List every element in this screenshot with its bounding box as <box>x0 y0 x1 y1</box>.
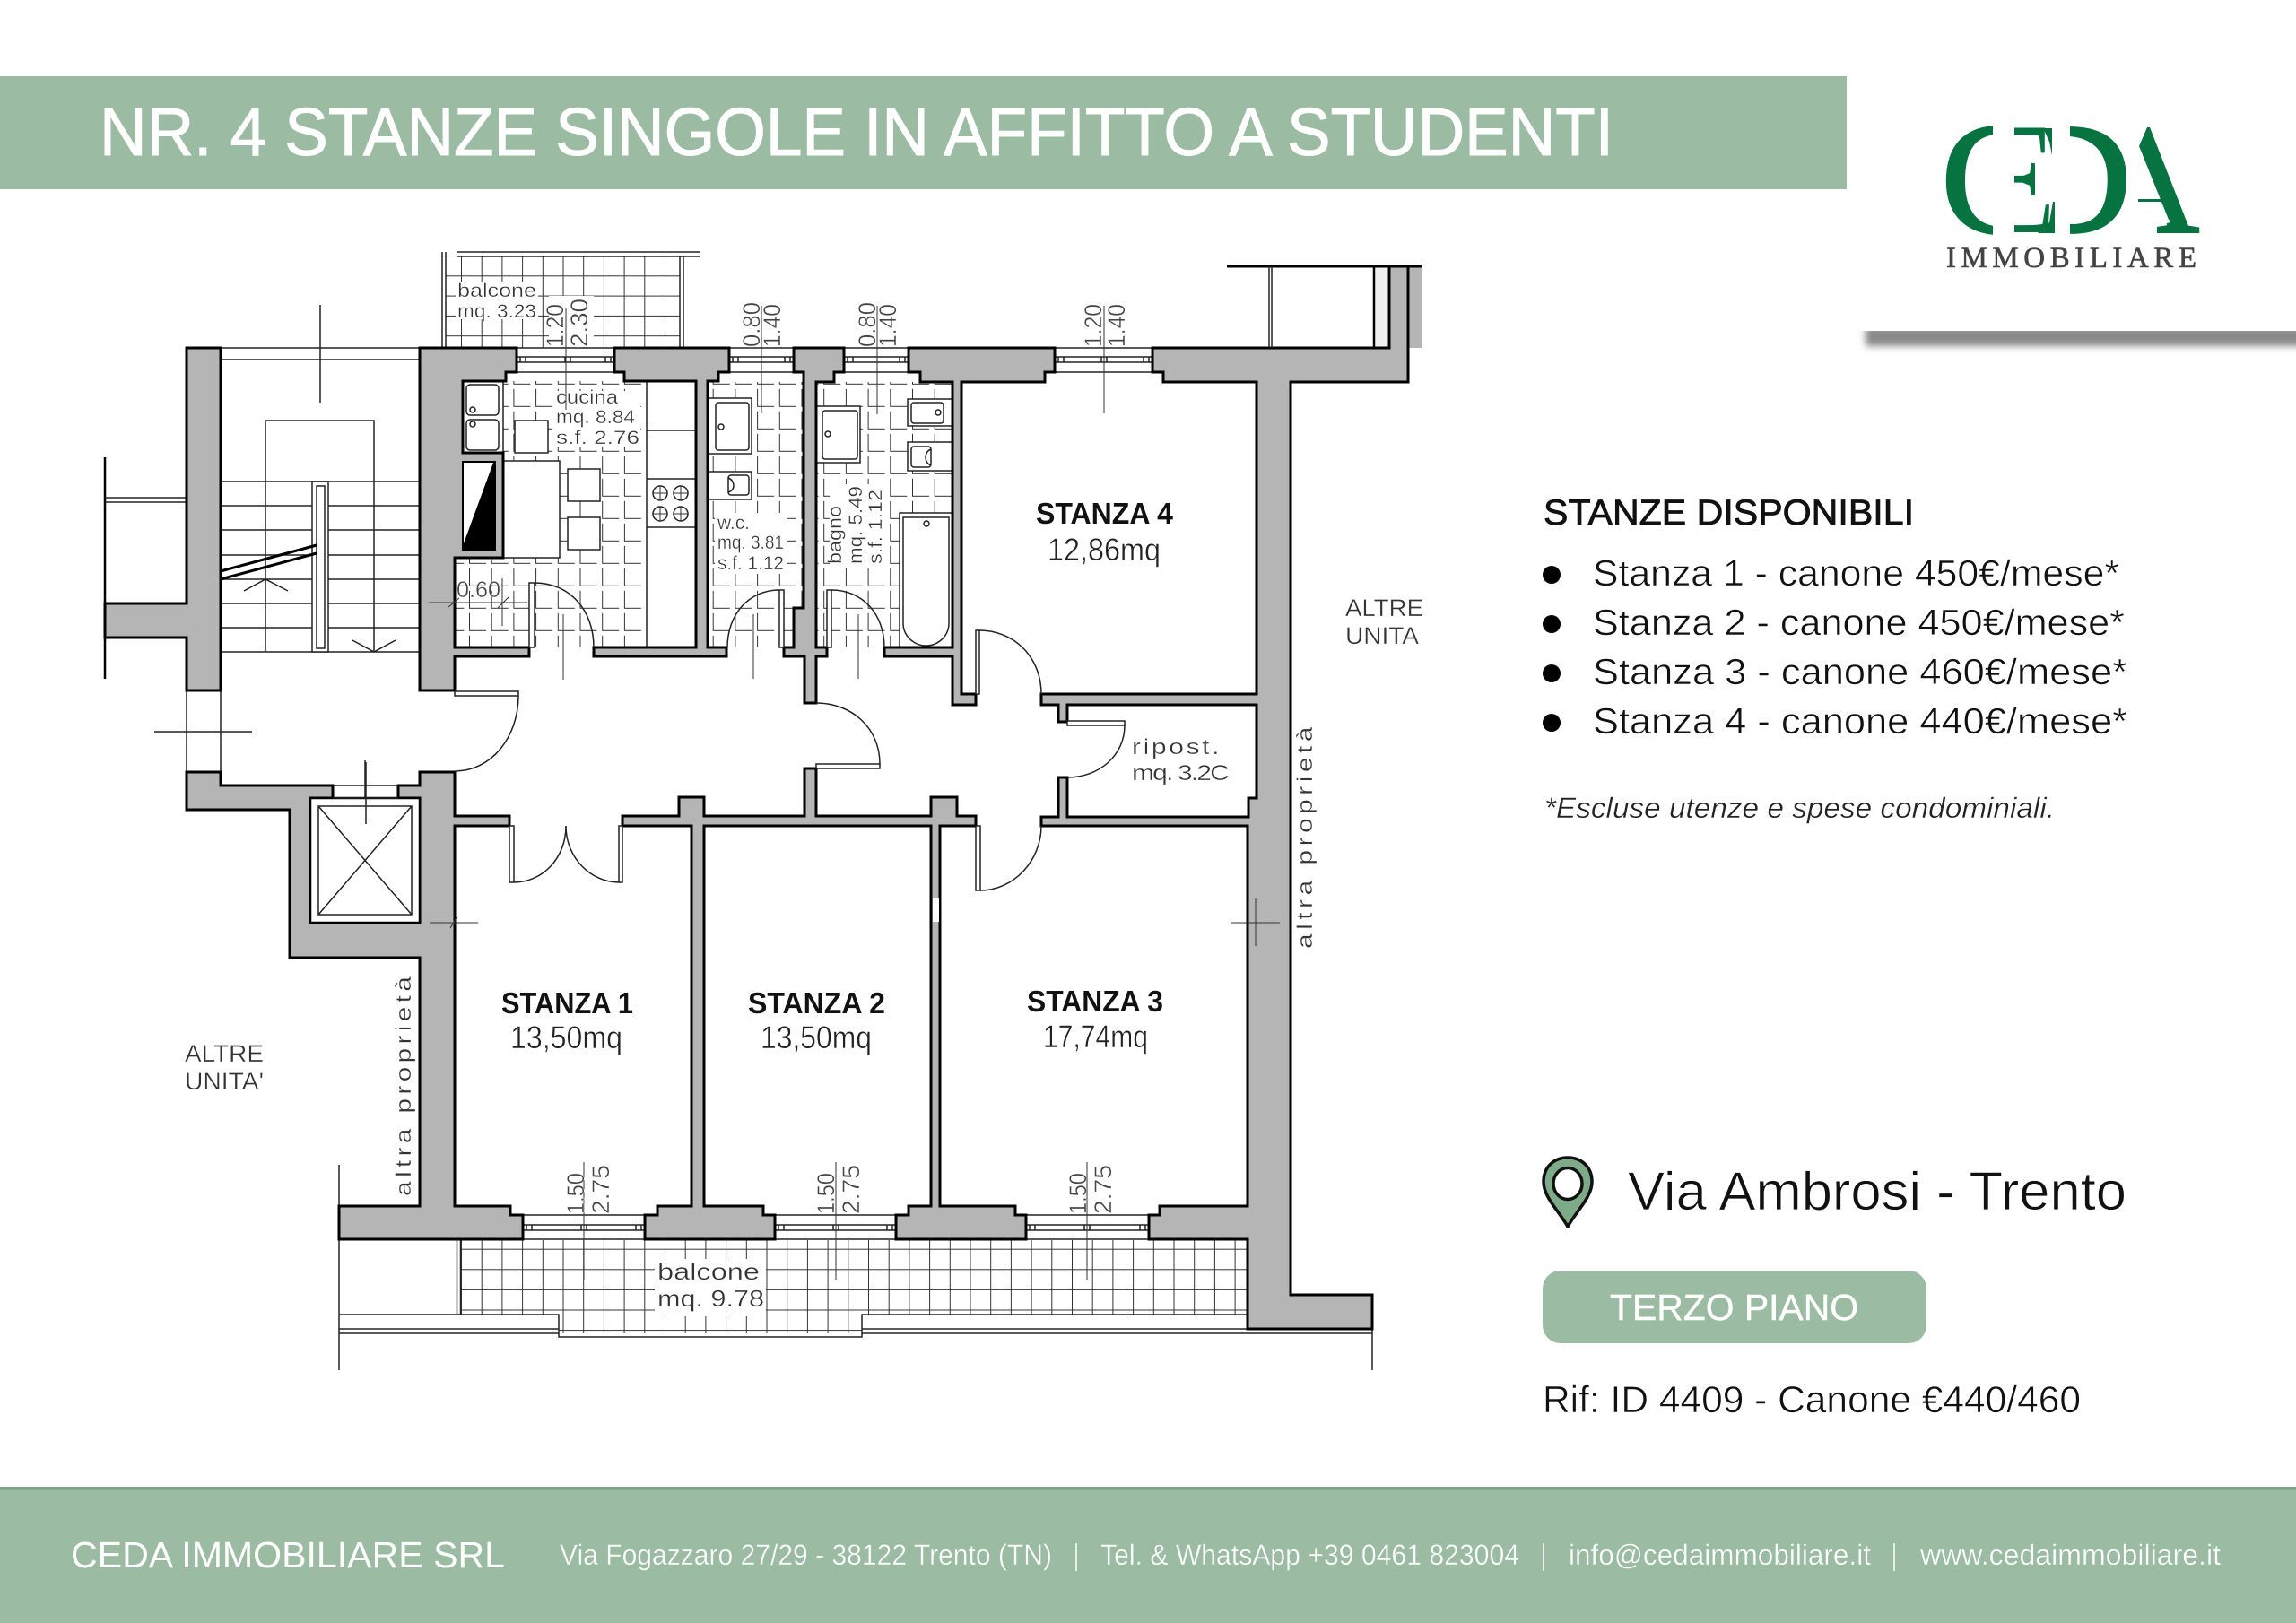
icon: location pin <box>1544 1158 1592 1227</box>
logo panel shadow <box>1866 326 2296 346</box>
kitchen fixtures <box>463 381 696 647</box>
window dimensions: 2.75 <box>838 1165 865 1214</box>
dimension lines <box>429 306 1280 1280</box>
logo: CEDA Immobiliare: A <box>2084 90 2200 267</box>
room label: stanza 4 <box>1036 497 1174 568</box>
logo: CEDA Immobiliare: C <box>1941 90 2048 267</box>
window dimensions: 2.75 <box>1090 1165 1117 1214</box>
adjacent units labels: UNITA' <box>185 1068 264 1095</box>
kitchen appliance black box <box>462 461 496 551</box>
bottom windows <box>523 1215 1149 1239</box>
window dimensions: 1.40 <box>1103 304 1130 347</box>
window dimensions: 2.30 <box>566 299 593 347</box>
kitchen text: s.f. 2.76 <box>556 428 639 448</box>
kitchen text: cucina <box>556 387 618 408</box>
window dimensions: 1.50 <box>813 1173 839 1214</box>
room label: stanza 4: STANZA 4 <box>1036 497 1174 530</box>
window dimensions: 1.50 <box>1065 1173 1091 1214</box>
list item 1: Stanza 1 - canone 450€/mese* <box>1593 552 2119 594</box>
adjacent units labels: altra proprietà <box>391 976 415 1196</box>
bathroom fixtures <box>816 399 952 647</box>
room label: stanza 3: 17,74mq <box>1043 1020 1148 1055</box>
WC fixtures: w.c. <box>717 513 750 534</box>
doors <box>455 583 1125 890</box>
company name: CEDA IMMOBILIARE SRL <box>71 1534 505 1575</box>
bathroom fixtures: s.f. 1.12 <box>865 490 886 564</box>
reference line: Rif: ID 4409 - Canone €440/460 <box>1543 1378 2081 1420</box>
floor plan <box>105 252 1423 1370</box>
window dimensions: 0.80 <box>738 302 765 347</box>
email: info@cedaimmobiliare.it <box>1569 1539 1871 1571</box>
list heading: STANZE DISPONIBILI <box>1544 493 1914 533</box>
storage label <box>1132 734 1230 785</box>
logo: CEDA Immobiliare: E <box>1987 91 2055 267</box>
room label: stanza 2: 13,50mq <box>761 1020 872 1055</box>
logo: CEDA Immobiliare <box>1946 126 2199 267</box>
footer <box>0 1487 2296 1623</box>
adjacent units labels: UNITA <box>1345 622 1419 649</box>
room label: stanza 3: STANZA 3 <box>1027 985 1163 1018</box>
list item 2: Stanza 2 - canone 450€/mese* <box>1593 602 2125 643</box>
bathroom fixtures: mq. 5.49 <box>846 486 866 564</box>
bullet points <box>1543 566 1561 732</box>
kitchen text: mq. 8.84 <box>556 407 635 428</box>
kitchen text <box>554 387 640 448</box>
lift shaft <box>310 762 420 923</box>
footnote: *Escluse utenze e spese condominiali. <box>1544 792 2055 824</box>
balcony top <box>442 252 700 348</box>
adjacent units labels: ALTRE <box>185 1040 264 1067</box>
logo panel <box>1849 54 2296 331</box>
list item 4: Stanza 4 - canone 440€/mese* <box>1593 700 2127 742</box>
storage label: mq. 3.2C <box>1132 760 1230 785</box>
logo: CEDA Immobiliare: D <box>2016 90 2132 267</box>
balcony top: mq. 3.23 <box>457 301 536 322</box>
room label: stanza 1: 13,50mq <box>510 1020 622 1055</box>
title banner <box>0 76 1847 189</box>
available rooms list <box>1543 493 2127 824</box>
adjacent units labels: ALTRE <box>1345 595 1423 621</box>
window dimensions: 1.20 <box>542 304 569 347</box>
room label: stanza 1: STANZA 1 <box>501 986 633 1020</box>
website: www.cedaimmobiliare.it <box>1919 1539 2221 1571</box>
top windows <box>517 348 1152 372</box>
adjacent units labels: altra proprietà <box>1292 726 1317 949</box>
floor badge: TERZO PIANO <box>1610 1287 1858 1328</box>
window dimensions: 1.20 <box>1080 304 1107 347</box>
floor tiles <box>455 381 952 647</box>
room label: stanza 1 <box>501 986 633 1055</box>
room label: stanza 4: 12,86mq <box>1048 533 1161 568</box>
WC fixtures <box>708 398 787 574</box>
window dimensions: 1.50 <box>562 1173 589 1214</box>
address: Via Ambrosi - Trento <box>1628 1161 2126 1221</box>
list item 3: Stanza 3 - canone 460€/mese* <box>1593 651 2127 692</box>
bottom balcony <box>339 1165 1372 1370</box>
WC fixtures: s.f. 1.12 <box>718 553 784 574</box>
bottom balcony: balcone <box>657 1258 760 1285</box>
room label: stanza 3 <box>1027 985 1163 1055</box>
balcony top: balcone <box>457 281 536 301</box>
logo: CEDA Immobiliare: IMMOBILIARE <box>1946 242 2196 274</box>
bottom balcony: mq. 9.78 <box>657 1285 764 1312</box>
room label: stanza 2: STANZA 2 <box>748 986 885 1020</box>
window dimensions: 0.60 <box>457 577 500 603</box>
WC fixtures: mq. 3.81 <box>718 533 784 553</box>
walls <box>105 266 1422 1329</box>
storage label: ripost. <box>1132 734 1220 759</box>
window dimensions: 2.75 <box>587 1165 614 1214</box>
window dimensions: 0.80 <box>854 302 881 347</box>
phone: Tel. & WhatsApp +39 0461 823004 <box>1100 1539 1519 1571</box>
window dimensions <box>457 299 1130 1214</box>
window dimensions: 1.40 <box>874 304 901 347</box>
adjacent units labels <box>185 595 1423 1196</box>
stairwell <box>105 305 420 824</box>
window dimensions: 1.40 <box>759 304 786 347</box>
room label: stanza 2 <box>748 986 885 1055</box>
floor badge <box>1543 1271 1926 1343</box>
title: NR. 4 STANZE SINGOLE IN AFFITTO A STUDENTI <box>100 94 1613 169</box>
company address: Via Fogazzaro 27/29 - 38122 Trento (TN) <box>560 1539 1052 1571</box>
bathroom fixtures: bagno <box>825 506 846 564</box>
